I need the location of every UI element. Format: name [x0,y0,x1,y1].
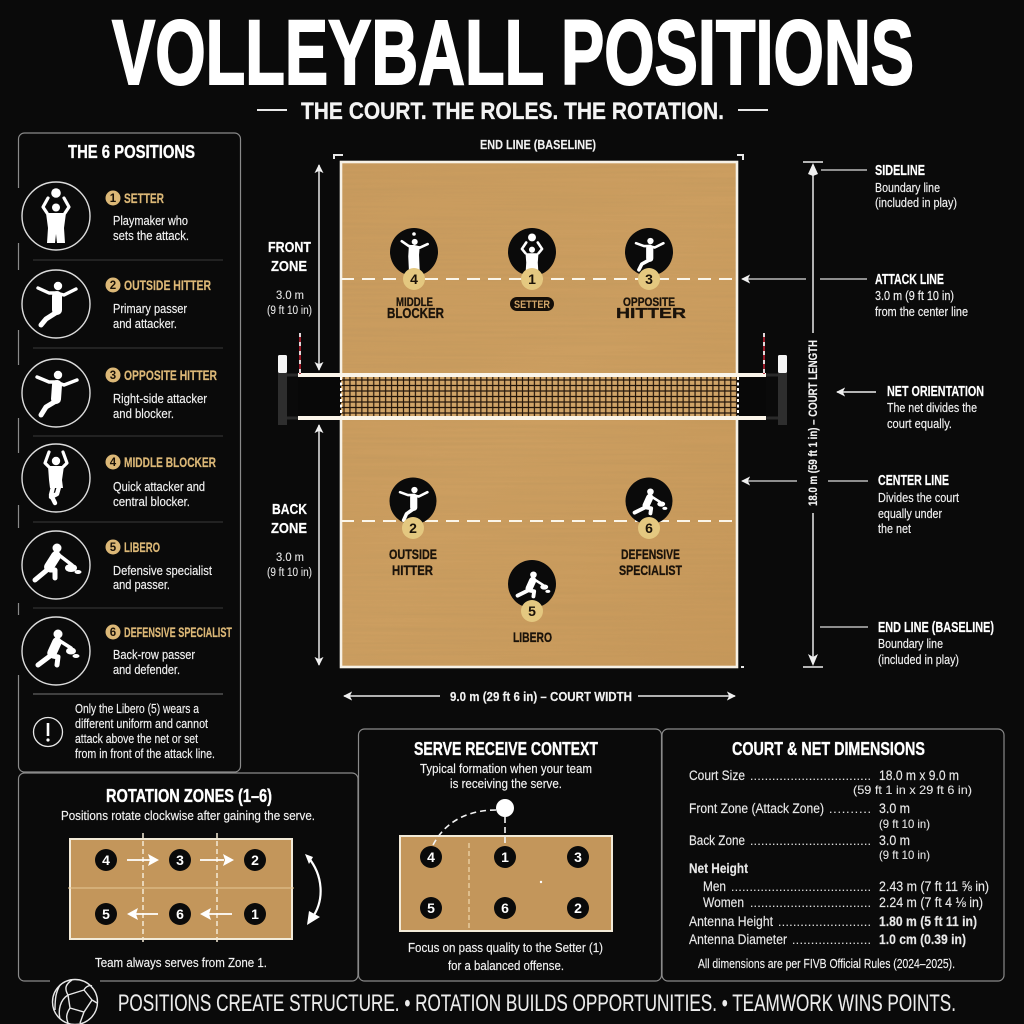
position 1: setter [22,182,189,250]
player 2 outside hitter: HITTER [392,562,433,578]
callout: center line: Divides the court [878,491,959,505]
serve receive mini court: 5 [427,900,435,916]
position 6: defensive specialist: DEFENSIVE SPECIALIST [124,624,232,640]
serve receive mini court: 1 [501,849,509,865]
position 6: defensive specialist: Back-row passer [113,648,195,662]
dimensions table: Court Size [689,768,745,783]
dimensions table: ................................. [750,896,871,910]
callout: net orientation: The net divides the [887,401,977,415]
callout: center line: equally under [878,507,942,521]
callout: sideline: SIDELINE [875,163,925,179]
callout: net orientation: court equally. [887,417,952,431]
dimensions table: .......... [829,802,871,816]
heading: rotation zones: ROTATION ZONES (1–6) [106,786,272,806]
court diagram [278,138,787,667]
player 3 opposite hitter: OPPOSITE [623,295,675,309]
serve receive description: is receiving the serve. [450,777,562,791]
player 5 libero [508,560,556,645]
player 2 outside hitter: 2 [409,520,417,536]
dimensions table: (9 ft 10 in) [879,817,930,831]
back zone label: BACK [272,501,307,518]
panel: rotation zones [18,773,358,981]
panel: the 6 positions [18,133,240,772]
top label: end line: END LINE (BASELINE) [480,138,596,152]
dimensions table: 18.0 m x 9.0 m [879,768,959,783]
position 4: middle blocker: Quick attacker and [113,480,205,494]
front zone label: ZONE [271,258,307,275]
rotation mini court [68,833,294,945]
dimensions table: 1.0 cm (0.39 in) [879,932,966,947]
dimensions table: Back Zone [689,833,745,848]
position 3: opposite hitter: 3 [110,370,116,382]
position 1: setter: SETTER [124,190,164,206]
rotation subtitle: Positions rotate clockwise after gaining the serve. [61,809,315,823]
dimensions table: ................................. [750,834,871,848]
rotation mini court: 5 [102,906,110,922]
court surface [341,162,737,667]
position 1: setter: sets the attack. [113,229,189,243]
rotation note: Team always serves from Zone 1. [95,956,267,970]
player 6 defensive specialist: SPECIALIST [619,562,682,578]
dimensions table [689,768,989,947]
serve receive mini court: 6 [501,900,509,916]
rotation mini court: 1 [251,906,259,922]
player 4 middle blocker [387,228,444,322]
rotation mini court: 2 [251,852,259,868]
player 6 defensive specialist [619,478,682,578]
heading: serve receive: SERVE RECEIVE CONTEXT [414,739,598,759]
position 1: setter: Playmaker who [113,214,188,228]
dimensions table: ...................................... [731,880,871,894]
net [278,333,787,425]
front zone arrow [318,165,320,370]
position 3: opposite hitter: Right-side attacker [113,392,207,406]
rotation mini court: 6 [176,906,184,922]
serve receive note [408,941,603,973]
position 4: middle blocker: central blocker. [113,495,190,509]
position 3: opposite hitter [22,359,217,427]
player 1 setter [508,228,556,311]
libero note: attack above the net or set [75,732,198,746]
clockwise arrow [305,854,321,925]
player 5 libero: LIBERO [513,629,552,645]
serve receive description [420,762,592,791]
position 5: libero: LIBERO [124,539,160,555]
libero note [34,702,215,761]
position 6: defensive specialist: and defender. [113,663,180,677]
callout: center line: CENTER LINE [878,473,949,489]
position 1: setter: 1 [110,193,117,205]
dimensions table: Antenna Diameter [689,932,787,947]
back zone label: (9 ft 10 in) [267,567,312,579]
libero note: Only the Libero (5) wears a [75,702,199,716]
player 3 opposite hitter: 3 [645,271,653,287]
back zone label: ZONE [271,520,307,537]
callout: end line: Boundary line [878,637,943,651]
position 2: outside hitter: 2 [110,280,116,292]
player 4 middle blocker: 4 [410,271,418,287]
callout: attack line: 3.0 m (9 ft 10 in) [875,289,954,303]
player 6 defensive specialist: 6 [645,520,653,536]
player 4 middle blocker: MIDDLE [396,295,433,309]
serve receive mini court: 3 [574,849,582,865]
player 1 setter: SETTER [514,299,550,311]
callout: end line [820,620,994,667]
dimensions table: ......................... [778,915,871,929]
serve receive mini court: 4 [427,849,435,865]
position 2: outside hitter: and attacker. [113,317,177,331]
dimensions table: Women [703,895,744,910]
callout: center line [742,473,959,536]
dimensions table: Front Zone (Attack Zone) [689,801,824,816]
dimensions table: Net Height [689,861,748,876]
back zone label [267,501,312,579]
back zone label: 3.0 m [276,550,304,564]
player 5 libero: 5 [528,603,536,619]
court length dimension: 18.0 m (59 ft 1 in) – COURT LENGTH [808,340,820,506]
player 2 outside hitter [389,478,437,578]
player 1 setter: 1 [528,271,536,287]
position 2: outside hitter: OUTSIDE HITTER [124,277,211,293]
player 4 middle blocker: BLOCKER [387,305,444,322]
player 2 outside hitter: OUTSIDE [389,546,437,562]
serve receive note: for a balanced offense. [448,959,564,973]
libero note: different uniform and cannot [75,717,208,731]
court width dimension: 9.0 m (29 ft 6 in) – COURT WIDTH [450,690,632,704]
position 5: libero: and passer. [113,578,170,592]
position 6: defensive specialist: 6 [110,627,116,639]
player 3 opposite hitter: HITTER [616,305,686,322]
position 3: opposite hitter: and blocker. [113,407,174,421]
position 4: middle blocker [22,444,216,512]
callout: center line: the net [878,522,911,536]
position 2: outside hitter: Primary passer [113,302,187,316]
rotation mini court: 4 [102,852,110,868]
dimensions table: 2.43 m (7 ft 11 ⅝ in) [879,879,989,894]
back zone arrow [318,425,320,665]
icon: volleyball [52,980,98,1024]
heading: dimensions: COURT & NET DIMENSIONS [732,739,925,759]
position 2: outside hitter [22,270,211,338]
position 5: libero [22,531,212,599]
panel: court and net dimensions [662,729,1004,981]
dimensions table: (59 ft 1 in x 29 ft 6 in) [853,783,972,797]
subtitle: THE COURT. THE ROLES. THE ROTATION. [301,98,724,125]
player 3 opposite hitter [616,228,686,322]
rotation mini court: 3 [176,852,184,868]
position 4: middle blocker: MIDDLE BLOCKER [124,454,216,470]
dimensions table: Men [703,879,726,894]
front zone label [267,239,312,317]
serve receive note: Focus on pass quality to the Setter (1) [408,941,603,955]
callout: attack line: ATTACK LINE [875,272,944,288]
serve receive mini court: 2 [574,900,582,916]
callout: attack line: from the center line [875,305,968,319]
dimensions table: 3.0 m [879,833,910,848]
player 6 defensive specialist: DEFENSIVE [621,546,680,562]
dimensions table: 3.0 m [879,801,910,816]
dimensions table: ................................. [750,769,871,783]
callout: sideline [821,163,957,210]
callout: sideline: (included in play) [875,196,957,210]
dimensions table: Antenna Height [689,914,773,929]
callout: net orientation: NET ORIENTATION [887,384,984,400]
callout: net orientation [837,384,984,431]
panel: serve receive context [358,729,662,981]
dimensions footnote: All dimensions are per FIVB Official Rules (2024–2025). [698,957,955,971]
serve receive description: Typical formation when your team [420,762,592,776]
position 6: defensive specialist [22,617,232,685]
libero note: from in front of the attack line. [75,747,215,761]
callout: end line: (included in play) [878,653,959,667]
dimensions table: (9 ft 10 in) [879,848,930,862]
front zone label: FRONT [268,239,311,256]
heading: the 6 positions: THE 6 POSITIONS [68,142,195,162]
dimensions table: 1.80 m (5 ft 11 in) [879,914,977,929]
callout: sideline: Boundary line [875,181,940,195]
attack lines [341,279,737,521]
serve receive mini court [400,799,612,931]
dimensions table: ..................... [792,933,871,947]
dimensions table: 2.24 m (7 ft 4 ⅛ in) [879,895,983,910]
position 3: opposite hitter: OPPOSITE HITTER [124,367,217,383]
callout: attack line [742,272,968,319]
court length dimension [803,162,823,667]
front zone label: (9 ft 10 in) [267,305,312,317]
position 5: libero: Defensive specialist [113,564,212,578]
position 4: middle blocker: 4 [110,457,117,469]
front zone label: 3.0 m [276,288,304,302]
position 5: libero: 5 [110,542,117,554]
